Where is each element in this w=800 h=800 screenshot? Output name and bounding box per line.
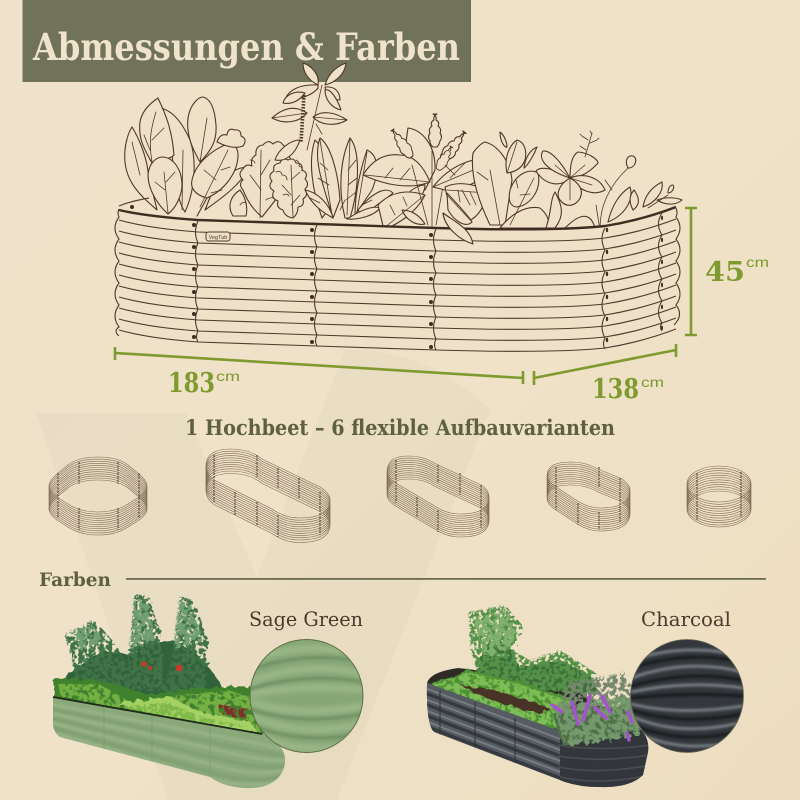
configuration 2: long oval bbox=[206, 449, 330, 542]
section heading: Farben: Farben bbox=[39, 569, 111, 591]
label: Charcoal: Charcoal bbox=[641, 607, 731, 631]
lettuce bbox=[432, 672, 572, 728]
plant: buds and sprigs bbox=[596, 156, 682, 230]
upper plants bbox=[468, 605, 595, 695]
corrugation ribs bbox=[425, 688, 655, 792]
bed body bbox=[427, 683, 648, 787]
dimension: width 183 cm: 183 bbox=[168, 368, 215, 399]
dimension: width 183 cm bbox=[115, 347, 523, 399]
dimension: depth 138 cm bbox=[534, 344, 676, 405]
photo: sage green raised bed bbox=[50, 594, 290, 788]
corrugated end and seam lines bbox=[115, 208, 680, 350]
tomatoes bbox=[141, 661, 182, 671]
soil rows bbox=[458, 684, 550, 714]
dimension: depth 138 cm: 138 bbox=[592, 374, 639, 405]
plant: curly lettuce bbox=[217, 129, 308, 218]
title text: Abmessungen & Farben bbox=[32, 25, 460, 69]
plant: broad leaves bbox=[472, 132, 549, 228]
configuration 3: medium oval bbox=[387, 456, 489, 537]
subtitle: 1 Hochbeet – 6 flexible Aufbauvarianten bbox=[185, 415, 615, 440]
bolts bbox=[192, 216, 663, 349]
plant: lavender with large leaves bbox=[363, 114, 497, 244]
brand tag bbox=[206, 232, 230, 241]
dimension: height 45 cm: cm bbox=[746, 254, 769, 270]
plant: tall flowering herb bbox=[272, 63, 347, 160]
title banner bbox=[22, 0, 471, 82]
purple flowers bbox=[552, 696, 632, 740]
plant: chard leaves bbox=[305, 138, 393, 219]
dimension: width 183 cm: cm bbox=[216, 368, 240, 384]
configuration 4: short oval bbox=[547, 462, 630, 531]
dimension: depth 138 cm: cm bbox=[641, 374, 664, 390]
configuration 5: round bbox=[687, 466, 751, 527]
swatch: sage green bbox=[250, 640, 363, 752]
rib lines bbox=[119, 219, 676, 351]
leaf overlapping rim bbox=[443, 213, 473, 244]
dimension: height 45 cm: 45 bbox=[705, 257, 745, 288]
black rim bbox=[53, 697, 262, 734]
dense plant base bbox=[60, 640, 232, 705]
foreground flowers leaves bbox=[552, 695, 640, 746]
configuration 1: rounded diamond bbox=[49, 457, 147, 535]
soil interior bbox=[427, 668, 640, 730]
dimension: height 45 cm bbox=[685, 208, 769, 335]
lettuce base bbox=[432, 670, 575, 730]
photo: charcoal raised bed bbox=[425, 605, 655, 792]
swatch: charcoal bbox=[630, 640, 744, 752]
plant: spinach leaves bbox=[125, 97, 249, 216]
lavender bush bbox=[555, 672, 640, 738]
line art: plants in raised bed bbox=[125, 63, 682, 244]
lettuce bbox=[53, 678, 264, 736]
rim bbox=[119, 198, 149, 206]
watermark V logo bbox=[36, 350, 490, 800]
line art: corrugated raised bed bbox=[115, 198, 681, 354]
foreground flowers base bbox=[552, 704, 640, 744]
tomato plants bbox=[64, 594, 208, 700]
upper plants base bbox=[475, 640, 600, 695]
label: Sage Green: Sage Green bbox=[249, 607, 363, 631]
corrugation ribs bbox=[50, 704, 290, 785]
brand tag: VegTub bbox=[209, 235, 227, 241]
plant: hibiscus bbox=[536, 131, 605, 228]
bed body bbox=[53, 697, 285, 788]
